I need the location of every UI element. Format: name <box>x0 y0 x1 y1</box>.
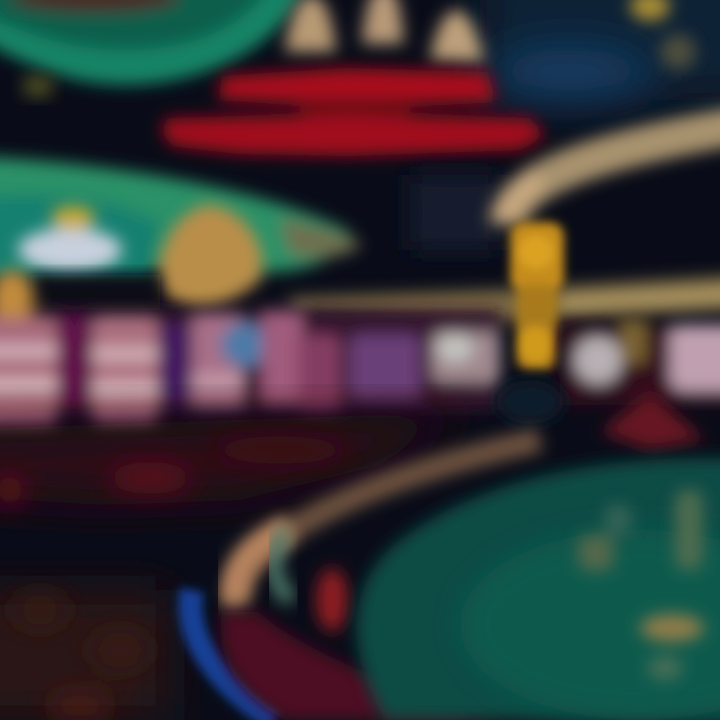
table felt <box>356 458 720 720</box>
gaming table <box>191 440 720 720</box>
top left green arc <box>0 0 310 85</box>
white light blob <box>18 206 122 272</box>
right slot machines <box>560 318 720 405</box>
red seats <box>0 436 350 506</box>
dark strip beneath left arc <box>30 275 160 310</box>
right beige curved balcony <box>500 122 720 225</box>
table maroon rim <box>221 612 500 720</box>
crowd highlights <box>12 594 150 718</box>
dark sign block <box>410 175 500 250</box>
dark red seat band <box>0 412 470 505</box>
table blue rim <box>191 590 275 720</box>
felt markings <box>578 490 704 680</box>
bottom left crowd <box>0 590 170 720</box>
slot 2 <box>92 318 158 426</box>
red sign <box>160 68 546 156</box>
table beige rim <box>235 440 540 600</box>
yellow column <box>510 222 564 370</box>
orange lamp blob <box>158 205 263 307</box>
middle left green arc <box>0 156 362 280</box>
dark blue stool <box>496 380 564 424</box>
slot 1 <box>0 318 57 428</box>
row of slot machines <box>0 270 500 428</box>
horizontal tan band <box>285 274 720 322</box>
small ochre spot <box>22 74 54 98</box>
beige ceiling bumps <box>285 0 484 62</box>
top right dark blue wall <box>480 0 720 106</box>
red pyramid table detail <box>600 392 705 450</box>
slot 3 <box>192 315 242 410</box>
top right lights <box>630 0 696 70</box>
